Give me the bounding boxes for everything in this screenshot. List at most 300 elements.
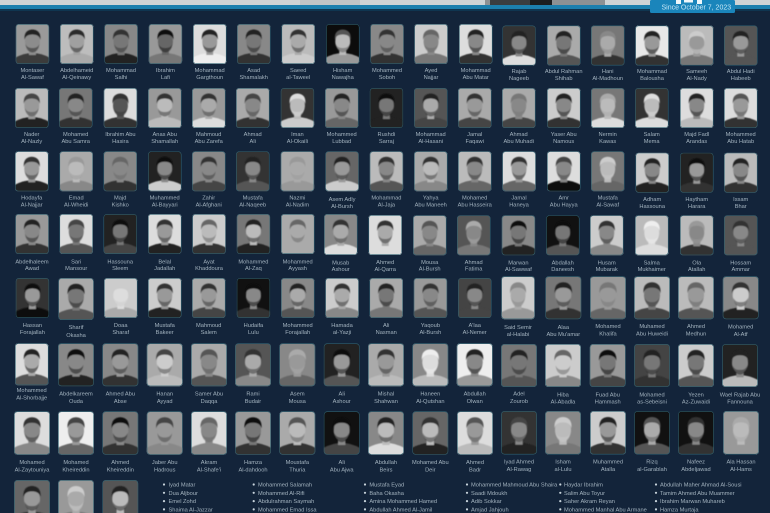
- portrait: Yaqoub Al-Bursh: [413, 278, 448, 336]
- portrait: Fuad Abu Hammash: [589, 344, 627, 406]
- portrait: Ibrahim Abu Hasira: [103, 88, 138, 145]
- portrait: Hassouna Sleem: Sleem: [112, 266, 129, 272]
- portrait: Mustafa Al-Naqeeb: [235, 151, 270, 208]
- portrait: Mohamed Abu Samra: Mohamed: [63, 132, 88, 138]
- portrait: Yezen Az-Zuwaidi: Az-Zuwaidi: [682, 400, 710, 406]
- name list column 2: Mohammed Salamah: [258, 482, 312, 488]
- portrait: Ayat Khaddoura: Ayat: [203, 260, 215, 266]
- portrait: Emad Al-Wheidi: [59, 151, 94, 208]
- portrait: Mohamed Abu Samra: [58, 88, 93, 145]
- portrait: Alaa Abu Mu'amar: [544, 276, 582, 338]
- portrait: Doaa Sharaf: Sharaf: [112, 330, 129, 336]
- portrait: Jaber Abu Hadrous: Jaber Abu: [152, 460, 178, 466]
- portrait: Nazmi Al-Nadim: [280, 151, 315, 208]
- portrait: Yaser Abu Namous: Yaser Abu: [551, 132, 577, 138]
- portrait: Majd Fadl Arandas: Arandas: [686, 139, 707, 145]
- portrait: Mustafa Al-Sawaf: Mustafa: [598, 196, 619, 202]
- portrait: Nermin Kawas: Kawas: [599, 139, 616, 145]
- portrait: Rizq al-Garablah: Rizq: [646, 460, 658, 466]
- portrait: Abdelhaleem Awad: Awad: [25, 266, 39, 272]
- portrait: Mustafa Al-Sawaf: [590, 151, 625, 208]
- portrait: Rizq al-Garablah: al-Garablah: [637, 467, 667, 473]
- portrait: Ahmad Abu Muhadi: [501, 88, 536, 145]
- portrait: Saeed al-Taweel: al-Taweel: [286, 75, 310, 81]
- portrait: Ahmed Medhun: Medhun: [686, 332, 706, 338]
- portrait: Rushdi Sarraj: Sarraj: [379, 139, 394, 145]
- portrait: Majd Kishko: [103, 151, 138, 208]
- portrait: Ahmed Medhun: [677, 276, 715, 338]
- portrait: Wael Rajab Abu Fannouna: Fannouna: [727, 400, 754, 406]
- portrait: Mahmoud Salem: Salem: [201, 330, 217, 336]
- portrait: Hisham Nawajha: Nawajha: [332, 75, 355, 81]
- portrait: Abdul Rahman Shihab: Shihab: [555, 76, 573, 82]
- portrait: Haytham Harara: Harara: [688, 204, 706, 210]
- portrait: Alaa Abu Mu'amar: Abu Mu'amar: [546, 332, 580, 338]
- portrait: A'laa Al-Nemer: A'laa: [468, 323, 482, 329]
- portrait: Iyad Ahmed Al-Rawag: Al-Rawag: [507, 467, 531, 473]
- portrait: Ayed Najjar: Ayed: [425, 68, 437, 74]
- portrait: Mohamed Al-Atf: Al-Atf: [734, 332, 748, 338]
- portrait: Mohamed Khalifa: Khalifa: [599, 332, 618, 338]
- portrait: Moustafa Thuria: Moustafa: [286, 460, 310, 466]
- name list column 5: [559, 482, 647, 513]
- portrait: Yezen Az-Zuwaidi: Yezen: [688, 392, 704, 398]
- portrait: Ali Nasman: [369, 278, 404, 336]
- portrait: A'laa Al-Nemer: Al-Nemer: [463, 330, 487, 336]
- name list column 6: Abdullah Maher Ahmad Al-Sousi: [660, 482, 742, 488]
- portrait: Iman Al-Okaili: Iman: [291, 132, 304, 138]
- portrait: Abdullah Olwan: Olwan: [467, 399, 483, 405]
- portrait: Ali Ashour: Ali: [339, 392, 345, 398]
- portrait: Abdullah Olwan: Abdullah: [464, 392, 486, 398]
- portrait: Zahir Al-Afghani: Zahir: [202, 196, 215, 202]
- portrait: Husam Mubarak: Mubarak: [596, 267, 618, 273]
- portrait: Hanan Ayyad: Hanan: [156, 392, 173, 398]
- portrait: Fuad Abu Hammash: Hammash: [595, 400, 621, 406]
- portrait: Mohamed Khalifa: Mohamed: [595, 324, 621, 330]
- portrait: Mohammad Salhi: Salhi: [115, 75, 127, 81]
- date badge: Since October 7, 2023: [661, 5, 731, 12]
- portrait: Mohamed Al-Zaytouniya: Al-Zaytouniya: [15, 468, 50, 474]
- portrait: Rizq al-Garablah: [633, 411, 671, 473]
- name list column 6: [655, 482, 742, 513]
- portrait: Ola Atallah: Atallah: [688, 267, 705, 273]
- portrait: Muhamed Abu Huweidi: Abu Huweidi: [636, 332, 668, 338]
- portrait: Mohammed Al-Zaq: [236, 214, 271, 272]
- portrait: Mohammed Abu Hatab: Abu Hatab: [727, 139, 754, 145]
- portrait: cropped photo 2: [57, 480, 95, 513]
- portrait: Nader Al-Nazly: Nader: [24, 132, 40, 138]
- portrait: Salma Mukhaimer: Mukhaimer: [638, 267, 666, 273]
- portrait: Belal Jadallah: [147, 214, 182, 272]
- portrait: Abdul Rahman Shihab: [545, 26, 583, 82]
- portrait: Ayat Khaddoura: [191, 214, 227, 272]
- portrait: Wael Rajab Abu Fannouna: [720, 344, 760, 406]
- portrait: Mustafa Bakeer: [147, 278, 182, 336]
- portrait: Mohammad Abu Matar: Abu Matar: [463, 75, 489, 81]
- portrait: Mohamed Al-Zaytouniya: [13, 411, 51, 474]
- portrait: Jaber Abu Hadrous: [146, 411, 184, 474]
- portrait: Mohamed Abu Hasseira: Mohamed: [462, 196, 487, 202]
- portrait: Mohammed Ayyash: Mohammed: [283, 260, 313, 266]
- name list column 3: Amina Mohammed Hamed: [369, 499, 437, 505]
- portrait: Mohammad Abu Matar: [458, 24, 493, 81]
- portrait: Hossam Ammar: Hossam: [730, 260, 751, 266]
- portrait: Nafeez Abdeljawad: [677, 411, 715, 473]
- portrait: Hossam Ammar: [723, 215, 758, 273]
- portrait: Ahmed Badr: Ahmed: [466, 460, 484, 466]
- portrait: Said Semir al-Halabi: Said Semir: [504, 325, 532, 331]
- portrait: Adham Hassouna: [635, 153, 670, 210]
- portrait: Marwan Al-Sawwaf: Marwan: [508, 260, 529, 266]
- portrait: Asem Adly Al-Bursh: Al-Bursh: [331, 204, 353, 210]
- portrait: Akram Al-Shafe'i: [190, 411, 228, 474]
- portrait: Emad Al-Wheidi: Emad: [69, 196, 84, 202]
- name list column 3: Baha Okasha: [369, 491, 405, 497]
- portrait: Yaqoub Al-Bursh: Al-Bursh: [419, 330, 441, 336]
- portrait: Mohammed Forajallah: Forajallah: [285, 330, 310, 336]
- portrait: Abdullah Olwan: [456, 343, 494, 405]
- portrait: Mohamed Kheireddin: Mohamed: [63, 460, 89, 466]
- portrait: Rami Budair: [234, 343, 272, 405]
- portrait: Mohammed Ayyash: [280, 214, 315, 272]
- portrait: Muhammed Atalla: [589, 411, 627, 473]
- portrait: Moustafa Thuria: [278, 411, 316, 474]
- portrait: Majd Kishko: Majd: [114, 196, 126, 202]
- portrait: Ahmad Fatima: Fatima: [465, 266, 483, 272]
- header photo strip: [0, 0, 770, 6]
- portrait: Hiba Al-Abadla: Hiba: [557, 392, 570, 398]
- portrait: Mohammad Gargthoun: [192, 24, 227, 81]
- portrait: Akram Al-Shafe'i: Akram: [201, 460, 217, 466]
- portrait: Mustafa Al-Naqeeb: Al-Naqeeb: [239, 202, 266, 208]
- portrait: Mohammed Ayyash: Ayyash: [288, 266, 307, 272]
- portrait: Nader Al-Nazly: Al-Nazly: [21, 139, 42, 145]
- portrait: Mohammed Abu Hatab: Mohammed: [726, 132, 756, 138]
- portrait: Ahmad Ali: Ahmad: [244, 132, 262, 138]
- portrait: Ibrahim Abu Hasira: Ibrahim Abu: [105, 132, 136, 138]
- portrait: Mahmoud Abu Zarefa: Abu Zarefa: [195, 139, 224, 145]
- portrait: Mohamed Abu Deir: Mohamed Abu: [412, 460, 449, 466]
- portrait: Salam Mema: [634, 88, 669, 145]
- portrait: Abdullah Beirs: [367, 411, 405, 474]
- portrait: Mohammed Abu Hatab: [723, 88, 758, 145]
- portrait: Yaqoub Al-Bursh: Yaqoub: [421, 323, 440, 329]
- portrait: Abdallah Daneesh: Abdallah: [552, 260, 574, 266]
- portrait: Ala Hassan Al-Hams: Al-Hams: [730, 467, 752, 473]
- portrait: Ali Abu Ajwa: Abu Ajwa: [330, 468, 354, 474]
- portrait: cropped photo 1: [13, 480, 51, 513]
- portrait: Mohammad Al-Hasani: Mohammad: [416, 132, 446, 138]
- portrait: cropped photo 3: [101, 480, 139, 513]
- portrait: Mousa Al-Bursh: Al-Bursh: [419, 266, 441, 272]
- portrait: Mohamed Al-Atf: Mohamed: [728, 324, 753, 330]
- portrait: Sameeh Al-Nady: Sameeh: [686, 69, 707, 75]
- portrait: Muhammed Atalla: Atalla: [601, 467, 616, 473]
- name list column 3: [364, 482, 437, 513]
- portrait: Hamza Al-dahdooh: Hamza: [244, 460, 263, 466]
- portrait: Adham Hassouna: Adham: [643, 197, 661, 203]
- portrait: Hisham Nawajha: [325, 24, 360, 81]
- portrait: Ala Hassan Al-Hams: [722, 411, 760, 473]
- portrait: Mohammad Abu Matar: Mohammad: [461, 68, 491, 74]
- portrait: Mahmoud Abu Zarefa: [191, 88, 226, 145]
- name list column 4: Adib Sokkar: [471, 499, 502, 505]
- portrait: Mohammad Gargthoun: Mohammad: [195, 68, 225, 74]
- portrait: Ola Atallah: [679, 215, 714, 273]
- portrait: Rami Budair: Rami: [246, 392, 260, 398]
- name list column 1: [163, 482, 213, 513]
- portrait: Hodayfa Al-Najjar: Hodayfa: [21, 196, 43, 202]
- portrait: Asem Mousa: Mousa: [289, 399, 307, 405]
- portrait: Mohammad Gargthoun: Gargthoun: [196, 75, 223, 81]
- portrait: Mousa Al-Bursh: Mousa: [421, 260, 439, 266]
- portrait: Mishal Shahwan: [367, 343, 405, 405]
- portrait: Yahya Abu Maneeh: Abu Maneeh: [415, 202, 447, 208]
- portrait: Iman Al-Okaili: Al-Okaili: [287, 139, 308, 145]
- portrait: Issam Bhar: Bhar: [735, 204, 747, 210]
- portrait: Ibrahim Abu Hasira: Hasira: [112, 139, 129, 145]
- portrait: Issam Bhar: Issam: [733, 197, 749, 203]
- portrait: Hani Al-Madhoun: Hani: [602, 69, 614, 75]
- portrait: Montaser Al-Sawaf: [15, 24, 50, 81]
- portrait: Hassan Forajallah: Hassan: [23, 323, 42, 329]
- portrait: Mohammad Al-Jaja: Mohammad: [371, 196, 401, 202]
- portrait: Mohamed as-Sebeisni: as-Sebeisni: [637, 400, 667, 406]
- portrait: Ahmed Medhun: Ahmed: [687, 324, 705, 330]
- portrait: Amr Abu Hayya: Abu Hayya: [550, 202, 578, 208]
- portrait: Mohamed Khalifa: [589, 276, 627, 338]
- portrait: Mohammad Salhi: [103, 24, 139, 81]
- portrait: Ibrahim Lafi: Lafi: [161, 75, 170, 81]
- name list column 4: Saadi Mdoukh: [471, 491, 507, 497]
- portrait: Salma Mukhaimer: [634, 215, 669, 273]
- portrait: Ola Atallah: Ola: [692, 260, 702, 266]
- portrait: Musab Ashour: Musab: [332, 260, 349, 266]
- portrait: Abdelhaleem Awad: Abdelhaleem: [15, 260, 49, 266]
- portrait: Isham al-Lulu: al-Lulu: [554, 467, 572, 473]
- portrait: Sharif Okasha: [57, 278, 95, 339]
- portrait: Sharif Okasha: Sharif: [69, 325, 84, 331]
- portrait: Mohammad Balousha: Mohammad: [637, 69, 667, 75]
- portrait: Ahmed Kheireddin: Ahmed: [111, 460, 129, 466]
- portrait: Mohammed Soboh: [369, 24, 405, 81]
- portrait: Yahya Abu Maneeh: Yahya: [423, 196, 439, 202]
- portrait: Ibrahim Lafi: Ibrahim: [156, 68, 175, 74]
- portrait: Ahmad Ali: Ali: [250, 139, 256, 145]
- portrait: Mohammed Forajallah: Mohammed: [283, 323, 313, 329]
- portrait: Asad Shamalakh: [236, 24, 271, 81]
- portrait: Muhammed Atalla: Muhammed: [593, 460, 623, 466]
- portrait: Ahmed Al-Qarra: Ahmed: [376, 260, 394, 266]
- portrait: Moustafa Thuria: Thuria: [289, 468, 306, 474]
- name list column 4: Mohammed Mahmoud Abu Shaira: [471, 482, 558, 488]
- portrait: Jamal Haneya: [501, 151, 537, 208]
- portrait: Mohammed Al-Zaq: Al-Zaq: [245, 266, 262, 272]
- portrait: Ayed Najjar: Najjar: [424, 75, 439, 81]
- portrait: Doaa Sharaf: Doaa: [114, 323, 128, 329]
- portrait: Akram Al-Shafe'i: Al-Shafe'i: [197, 468, 221, 474]
- portrait: Mahmoud Salem: Mahmoud: [196, 323, 221, 329]
- portrait: Iman Al-Okaili: [280, 88, 315, 145]
- portrait: Haneen Al-Qutshan: [411, 343, 449, 405]
- portrait: Anas Abu Shamallah: Shamallah: [151, 139, 178, 145]
- portrait: Muhammed Al-Bayyari: Muhammed: [150, 196, 180, 202]
- portrait: Mohammed Al-Shorbajje: [14, 343, 49, 402]
- portrait: Husam Mubarak: Husam: [598, 260, 616, 266]
- portrait: Hiba Al-Abadla: [544, 344, 582, 406]
- name list column 5: Saher Akram Reyan: [564, 499, 615, 505]
- name list column 2: Abdulrahman Saymah: [258, 499, 314, 505]
- portrait: Nazmi Al-Nadim: Nazmi: [289, 196, 305, 202]
- portrait: Rajab Nageeb: Nageeb: [509, 76, 529, 82]
- name list column 3: Mustafa Eyad: [369, 482, 404, 488]
- portrait: Hanan Ayyad: Ayyad: [157, 399, 173, 405]
- portrait: Ali Abu Ajwa: [323, 411, 361, 474]
- portrait: Hudaifa Lulu: [236, 278, 271, 336]
- portrait: Nazmi Al-Nadim: Al-Nadim: [286, 202, 309, 208]
- portrait: Ahmed Kheireddin: [101, 411, 139, 474]
- portrait: Ahmad Fatima: Ahmad: [465, 260, 483, 266]
- portrait: Saeed al-Taweel: [281, 24, 316, 81]
- portrait: Haytham Harara: [679, 153, 714, 210]
- portrait: Mohammed Al-Shorbajje: Mohammed: [17, 388, 47, 394]
- portrait: Abdullah Beirs: Beirs: [380, 468, 393, 474]
- portrait: Mahmoud Salem: [191, 278, 226, 336]
- portrait: Musab Ashour: [323, 214, 358, 273]
- portrait: Abdul Hadi Habeeb: Habeeb: [731, 76, 751, 82]
- portrait: Sameeh Al-Nady: Al-Nady: [687, 76, 707, 82]
- portrait: Haytham Harara: Haytham: [685, 197, 708, 203]
- portrait: Samer Abu Daqqa: Samer Abu: [195, 392, 223, 398]
- portrait: Mohammed Al-Zaq: Mohammed: [238, 260, 268, 266]
- portrait: Abdul Rahman Shihab: Abdul Rahman: [545, 69, 583, 75]
- portrait: Jamal Faqawi: [457, 88, 492, 145]
- portrait: Sameeh Al-Nady: [679, 26, 714, 82]
- portrait: Fuad Abu Hammash: Fuad Abu: [596, 392, 620, 398]
- portrait: Ahmed Badr: Badr: [469, 468, 481, 474]
- portrait: Mohamed Abu Hasseira: [457, 151, 493, 208]
- portrait: Mohammad Al-Hasani: Al-Hasani: [418, 139, 443, 145]
- portrait: Muhamed Abu Huweidi: [633, 276, 671, 338]
- portrait: Mohamed Kheireddin: [57, 411, 95, 474]
- portrait: Mousa Al-Bursh: [412, 215, 447, 272]
- portrait: Hassouna Sleem: [103, 214, 138, 272]
- portrait: Nermin Kawas: [590, 88, 625, 145]
- portrait: Rushdi Sarraj: [369, 88, 404, 145]
- portrait: Mohamed Abu Deir: Deir: [425, 468, 436, 474]
- portrait: Mohamed Abu Deir: [411, 411, 449, 474]
- portrait: Hamada al-Yazji: al-Yazji: [333, 330, 351, 336]
- name list column 5: Salim Abu Toyur: [564, 491, 605, 497]
- portrait: Ahmed Kheireddin: Kheireddin: [107, 468, 134, 474]
- portrait: Nader Al-Nazly: [14, 88, 49, 145]
- portrait: Yaser Abu Namous: [546, 88, 581, 145]
- portrait: Mohammad Al-Jaja: [369, 151, 404, 208]
- portrait: Adel Zourob: Adel: [513, 392, 525, 398]
- portrait: Hanan Ayyad: [146, 343, 184, 405]
- portrait: Jamal Haneya: Haneya: [509, 202, 530, 208]
- portrait: Asad Shamalakh: Shamalakh: [239, 75, 268, 81]
- portrait: Asem Mousa: Asem: [290, 392, 305, 398]
- portrait: Said Semir al-Halabi: [500, 276, 536, 338]
- name list column 6: Ibrahim Marwan Muhareb: [660, 499, 725, 505]
- portrait: Jamal Faqawi: Jamal: [467, 132, 482, 138]
- name list column 1: Dua Aljbour: [168, 491, 198, 497]
- portrait: Mohamed as-Sebeisni: Mohamed: [639, 392, 665, 398]
- portrait: Montaser Al-Sawaf: Montaser: [21, 68, 44, 74]
- portrait: Ahmed Badr: [456, 411, 494, 474]
- portrait: Abdallah Daneesh: Daneesh: [551, 267, 574, 273]
- portrait: Hamza Al-dahdooh: [234, 411, 272, 474]
- portrait: Abdelhaleem Awad: [14, 214, 50, 272]
- portrait: Ayed Najjar: [413, 24, 449, 81]
- name list column 1: Iyad Matar: [168, 482, 195, 488]
- date badge: [650, 0, 735, 13]
- portrait: Rajab Nageeb: [501, 26, 537, 82]
- portrait: Adel Zourob: [500, 344, 538, 405]
- portrait: Samer Abu Daqqa: Daqqa: [201, 399, 218, 405]
- portrait: Mohammad Al-Hasani: [413, 88, 448, 145]
- portrait: Ahmad Fatima: [456, 215, 491, 272]
- portrait: Marwan Al-Sawwaf: [501, 215, 536, 273]
- portrait: Issam Bhar: [723, 153, 758, 210]
- portrait: Hudaifa Lulu: Lulu: [248, 330, 259, 336]
- portrait: Jamal Haneya: Jamal: [511, 196, 527, 202]
- portrait: Mohamed Abu Hasseira: Abu Hasseira: [458, 202, 493, 208]
- portrait: Adel Zourob: Zourob: [510, 399, 528, 405]
- portrait: Abdelhameid Al-Qeinawy: [59, 24, 94, 81]
- portrait: Doaa Sharaf: [103, 278, 138, 336]
- portrait: Yaser Abu Namous: Namous: [553, 139, 574, 145]
- portrait: Abdelkareem Ouda: Abdelkareem: [59, 392, 93, 398]
- portrait: Mahmoud Abu Zarefa: Mahmoud: [196, 132, 221, 138]
- portrait: Mohammad Balousha: Balousha: [640, 76, 665, 82]
- name list column 6: Tamim Ahmed Abu Muammer: [660, 491, 735, 497]
- portrait: Saeed al-Taweel: Saeed: [290, 68, 306, 74]
- portrait: Muhammed Al-Bayyari: [147, 151, 182, 208]
- portrait: Majd Fadl Arandas: [679, 88, 714, 145]
- portrait: Mustafa Bakeer: Mustafa: [155, 323, 176, 329]
- portrait: Musab Ashour: Ashour: [332, 267, 350, 273]
- portrait: Isham al-Lulu: Isham: [555, 460, 571, 466]
- portrait: Belal Jadallah: Jadallah: [154, 266, 175, 272]
- portrait: Hamada al-Yazji: Hamada: [331, 323, 354, 329]
- portrait: Adham Hassouna: Hassouna: [639, 204, 666, 210]
- portrait: Ahmad Ali: [235, 88, 270, 145]
- portrait: Mohamed Kheireddin: Kheireddin: [62, 468, 90, 474]
- portrait: Mishal Shahwan: Mishal: [378, 392, 394, 398]
- portrait: Mohammad Al-Jaja: Al-Jaja: [378, 202, 396, 208]
- name list column 2: [253, 482, 317, 513]
- portrait: Mohamed Al-Atf: [722, 276, 760, 338]
- portrait: Mohammed Lubbad: [324, 88, 359, 145]
- portrait: Abdelkareem Ouda: [57, 343, 95, 405]
- portrait: Mohamed Abu Samra: Abu Samra: [61, 139, 91, 145]
- portrait: Sharif Okasha: Okasha: [66, 333, 87, 339]
- portrait: Asem Mousa: [278, 343, 316, 405]
- portrait: Hani Al-Madhoun: [590, 26, 625, 82]
- portrait: Ali Nasman: Nasman: [376, 330, 397, 336]
- portrait: A'laa Al-Nemer: [457, 278, 492, 336]
- portrait: Haneen Al-Qutshan: Haneen: [420, 392, 440, 398]
- portrait: Hassan Forajallah: Forajallah: [20, 330, 45, 336]
- portrait: Iyad Ahmed Al-Rawag: [500, 411, 538, 473]
- portrait: Mohammed Soboh: Mohammed: [372, 68, 402, 74]
- portrait: Hodayfa Al-Najjar: [14, 151, 49, 208]
- portrait: Majd Fadl Arandas: Majd Fadl: [684, 132, 709, 138]
- portrait: Mishal Shahwan: Shahwan: [374, 399, 398, 405]
